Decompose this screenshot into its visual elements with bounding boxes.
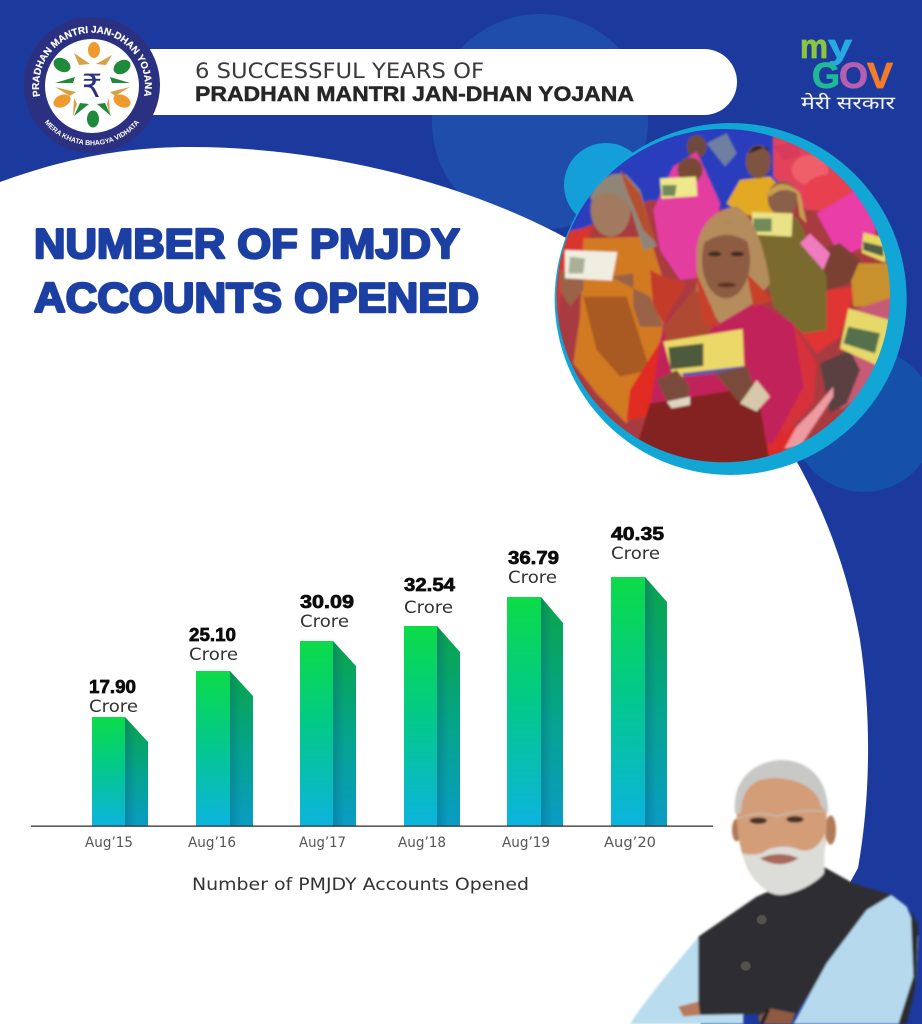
photo circle: women holding passbooks: [553, 123, 907, 475]
logo: MyGov: O: [839, 55, 868, 96]
logo: Pradhan Mantri Jan-Dhan Yojana: ₹: [82, 67, 102, 105]
logo: Pradhan Mantri Jan-Dhan Yojana: MERA KHATA BHAGYA VIDHATA: [44, 120, 140, 146]
axis labels: Aug’17: [299, 835, 346, 851]
logo: Pradhan Mantri Jan-Dhan Yojana: PRADHAN MANTRI JAN-DHAN YOJANA: [32, 26, 152, 97]
logo: MyGov: y: [828, 28, 852, 66]
bar: Aug'16: [196, 671, 253, 826]
value labels: 40.35: [611, 524, 664, 544]
unit labels: Crore: [300, 612, 349, 632]
portrait: Prime Minister: [630, 760, 918, 1024]
bar: Aug'20: [611, 577, 667, 826]
title: [34, 220, 479, 321]
unit labels: Crore: [404, 598, 453, 618]
header line 1: 6 SUCCESSFUL YEARS OF: [195, 59, 484, 84]
unit labels: Crore: [89, 697, 138, 717]
axis labels: Aug’15: [85, 835, 133, 851]
axis labels: [85, 835, 656, 851]
value labels: 25.10: [189, 625, 236, 645]
unit labels: Crore: [508, 568, 557, 588]
header line 2: PRADHAN MANTRI JAN-DHAN YOJANA: [195, 82, 634, 106]
title: NUMBER OF PMJDY: [34, 220, 460, 267]
value labels: 30.09: [300, 592, 354, 612]
logo: MyGov: G: [812, 55, 840, 96]
value labels: [89, 524, 664, 697]
logo: MyGov: V: [867, 55, 893, 96]
logo: Pradhan Mantri Jan-Dhan Yojana: [24, 17, 160, 153]
background bubble: lower right: [792, 348, 922, 492]
logo: MyGov: मेरी सरकार: [801, 92, 896, 113]
axis labels: Aug’16: [188, 835, 236, 851]
bar: Aug'15: [92, 717, 148, 826]
logo: MyGov: m: [800, 28, 828, 66]
unit labels: Crore: [611, 544, 660, 564]
logo: MyGov: [800, 28, 896, 113]
title: ACCOUNTS OPENED: [34, 274, 479, 321]
background bubble: cyan: [564, 143, 648, 227]
bar: Aug'19: [507, 597, 563, 826]
axis labels: Aug’20: [604, 835, 656, 851]
value labels: 32.54: [404, 575, 455, 595]
unit labels: [89, 544, 660, 717]
bar: Aug'17: [300, 641, 356, 826]
bar chart: [31, 577, 713, 827]
chart caption: Number of PMJDY Accounts Opened: [192, 875, 529, 895]
background bubble: large blue: [432, 14, 648, 230]
bar: Aug'18: [404, 626, 460, 826]
value labels: 36.79: [508, 548, 559, 568]
axis labels: Aug’18: [398, 835, 446, 851]
axis labels: Aug’19: [502, 835, 550, 851]
unit labels: Crore: [189, 645, 238, 665]
value labels: 17.90: [89, 677, 136, 697]
header ribbon: [140, 49, 737, 115]
